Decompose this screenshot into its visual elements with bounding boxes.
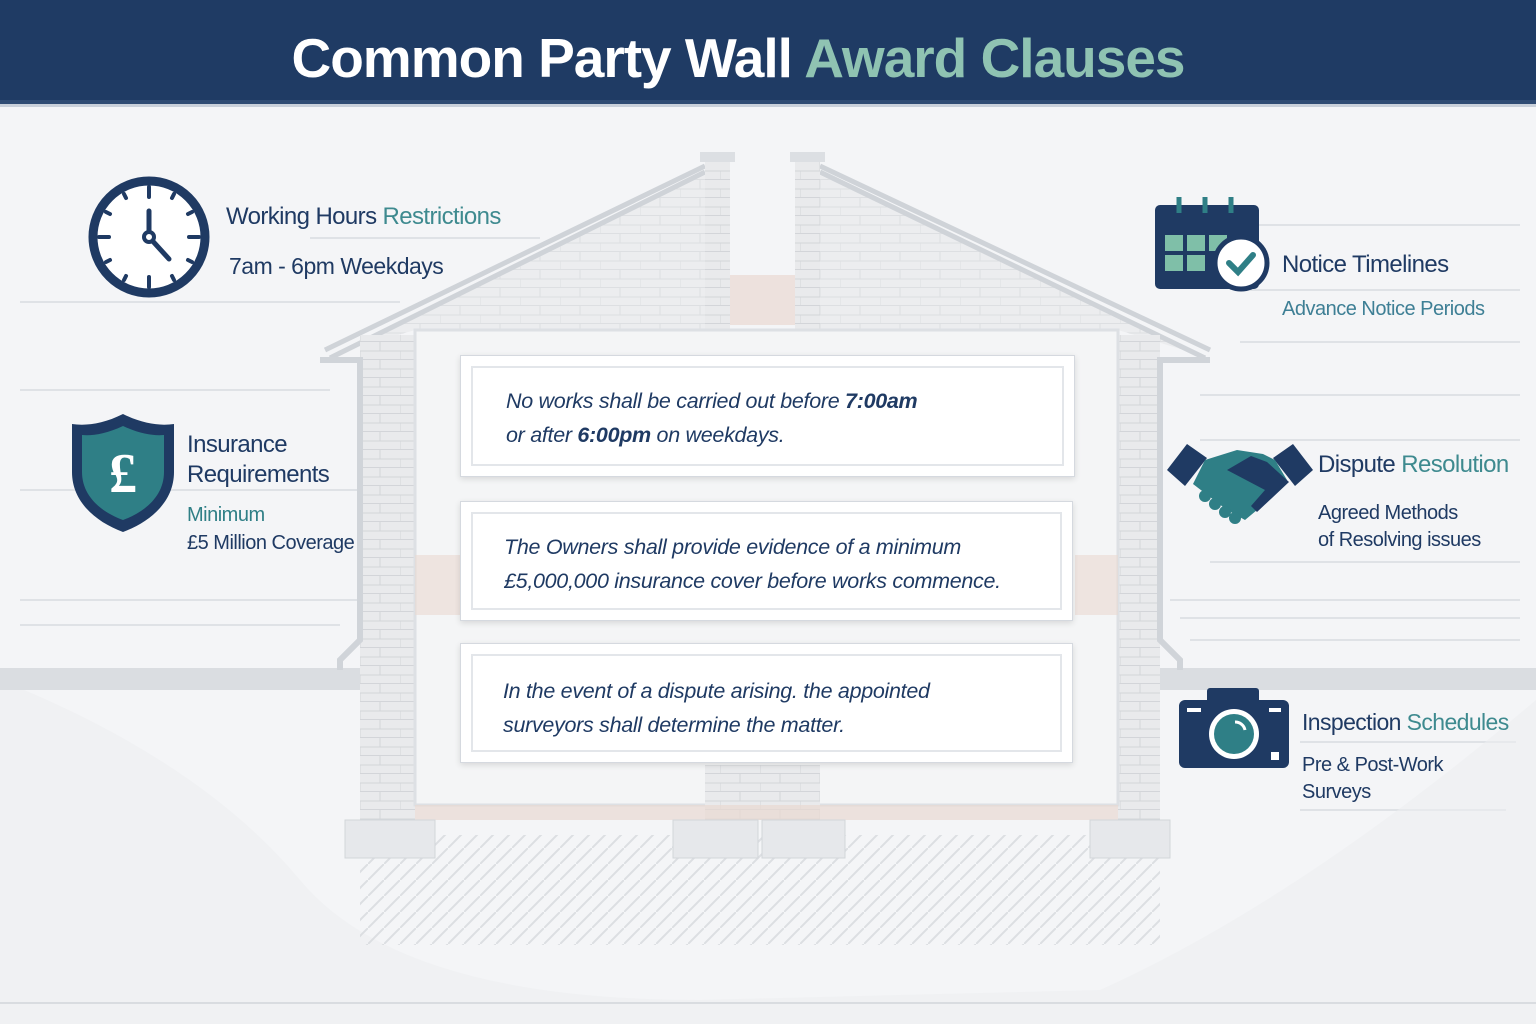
- icon: calendar: [1155, 197, 1270, 292]
- clause box 3: In the event of a dispute arising. the appointed: [503, 679, 930, 703]
- inspection schedules text: Pre & Post-Work: [1302, 754, 1443, 776]
- header bar: [0, 0, 1536, 104]
- insurance text: Requirements: [187, 461, 329, 488]
- clause box 3: [460, 643, 1073, 763]
- notice timelines text: Notice Timelines: [1282, 251, 1448, 278]
- insurance text: Minimum: [187, 504, 265, 526]
- working hours text: 7am - 6pm Weekdays: [229, 253, 443, 279]
- working hours text: [226, 203, 501, 279]
- dispute resolution text: of Resolving issues: [1318, 529, 1481, 551]
- dispute resolution text: [1318, 451, 1509, 551]
- insurance text: [187, 431, 354, 554]
- clause box 3: surveyors shall determine the matter.: [503, 713, 845, 737]
- clause box 1: No works shall be carried out before 7:00am: [506, 389, 917, 413]
- insurance text: £5 Million Coverage: [187, 532, 354, 554]
- clause box 2: The Owners shall provide evidence of a minimum: [504, 535, 961, 559]
- inspection schedules text: Surveys: [1302, 781, 1371, 803]
- insurance text: Insurance: [187, 431, 287, 458]
- icon: camera: [1179, 688, 1289, 768]
- notice timelines text: Advance Notice Periods: [1282, 298, 1484, 320]
- inspection schedules text: Inspection Schedules: [1302, 709, 1509, 735]
- working hours text: Working Hours Restrictions: [226, 203, 501, 230]
- clause box 2: £5,000,000 insurance cover before works commence.: [504, 569, 1001, 593]
- icon: shield: £: [109, 443, 137, 505]
- clause box 1: or after 6:00pm on weekdays.: [506, 423, 784, 447]
- icon: shield: [72, 414, 174, 532]
- notice timelines text: [1282, 251, 1484, 320]
- title: Common Party Wall Award Clauses: [291, 27, 1185, 89]
- icon: handshake: [1167, 444, 1313, 524]
- clause box 1: [460, 355, 1075, 477]
- inspection schedules text: [1302, 709, 1509, 803]
- icon: clock: [88, 176, 210, 298]
- clause box 2: [460, 501, 1073, 621]
- dispute resolution text: Dispute Resolution: [1318, 451, 1509, 478]
- dispute resolution text: Agreed Methods: [1318, 502, 1458, 524]
